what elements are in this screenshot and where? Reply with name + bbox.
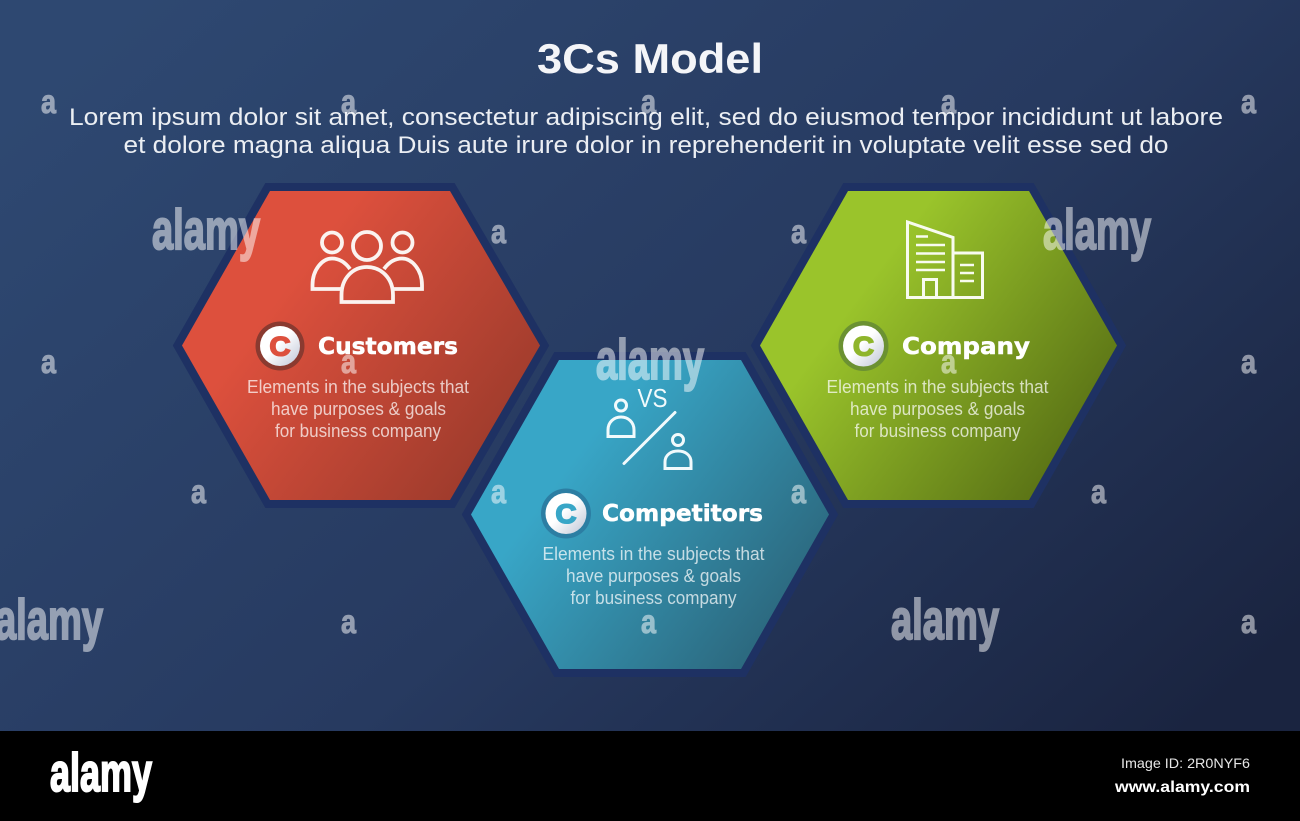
title: 3Cs Model — [537, 35, 763, 82]
watermark overlay: a — [341, 83, 357, 120]
watermark overlay: a — [941, 83, 957, 120]
watermark overlay: a — [1241, 603, 1257, 640]
description: customers: for business company — [275, 421, 441, 441]
description: competitors — [542, 544, 764, 608]
hexagon: customers — [182, 191, 540, 500]
badge: C customers — [256, 322, 304, 370]
watermark overlay: a — [1091, 473, 1107, 510]
description: company: have purposes & goals — [850, 399, 1025, 419]
watermark overlay: a — [641, 603, 657, 640]
description: customers: Elements in the subjects that — [247, 377, 469, 397]
description: company — [826, 377, 1048, 441]
badge: C customers: C — [270, 332, 290, 362]
watermark overlay: a — [941, 343, 957, 380]
hexagon: competitors — [471, 360, 829, 669]
intro text block: Lorem ipsum dolor sit amet, consectetur adipiscing elit, sed do eiusmod tempor incididunt ut labore — [69, 104, 1223, 131]
icon: person versus person — [608, 383, 691, 468]
icon: person versus person: VS — [638, 383, 668, 413]
watermark overlay: a — [491, 473, 507, 510]
hexagon: company — [760, 191, 1117, 500]
watermark overlay: a — [1241, 83, 1257, 120]
watermark overlay: alamy — [152, 198, 260, 262]
badge: C competitors — [541, 488, 591, 538]
image id: Image ID: 2R0NYF6 — [1121, 755, 1250, 771]
badge: C competitors: C — [556, 499, 576, 529]
watermark overlay: a — [341, 603, 357, 640]
watermark overlay — [0, 83, 1257, 652]
website: www.alamy.com — [1114, 779, 1250, 796]
description: customers: have purposes & goals — [271, 399, 446, 419]
panel: customers — [182, 191, 540, 500]
watermark overlay: a — [341, 343, 357, 380]
watermark overlay: a — [41, 343, 57, 380]
watermark overlay: alamy — [1043, 198, 1151, 262]
heading: competitors: Competitors — [602, 501, 763, 527]
watermark overlay: alamy — [891, 588, 999, 652]
intro text block: et dolore magna aliqua Duis aute irure dolor in reprehenderit in voluptate velit esse sed do — [124, 132, 1168, 159]
description: competitors: have purposes & goals — [566, 566, 741, 586]
icon: group of people — [312, 232, 422, 302]
watermark overlay: a — [191, 473, 207, 510]
intro text block — [69, 104, 1223, 159]
watermark overlay: a — [641, 83, 657, 120]
panel: competitors — [471, 360, 829, 669]
badge: C company — [838, 321, 888, 371]
description: competitors: for business company — [570, 588, 736, 608]
description: competitors: Elements in the subjects that — [542, 544, 764, 564]
description: company: for business company — [854, 421, 1020, 441]
watermark overlay: alamy — [596, 328, 704, 392]
footer band — [0, 731, 1300, 821]
watermark overlay: a — [491, 213, 507, 250]
watermark overlay: a — [41, 83, 57, 120]
footer logo: alamy — [50, 743, 152, 803]
badge: C company: C — [853, 332, 874, 362]
heading: company: Company — [902, 334, 1030, 360]
watermark overlay: a — [791, 213, 807, 250]
icon: office buildings — [908, 222, 982, 298]
watermark overlay: a — [791, 473, 807, 510]
heading: customers: Customers — [318, 334, 458, 360]
watermark overlay: a — [1241, 343, 1257, 380]
panel: company — [760, 191, 1117, 500]
description: customers — [247, 377, 469, 441]
description: company: Elements in the subjects that — [826, 377, 1048, 397]
